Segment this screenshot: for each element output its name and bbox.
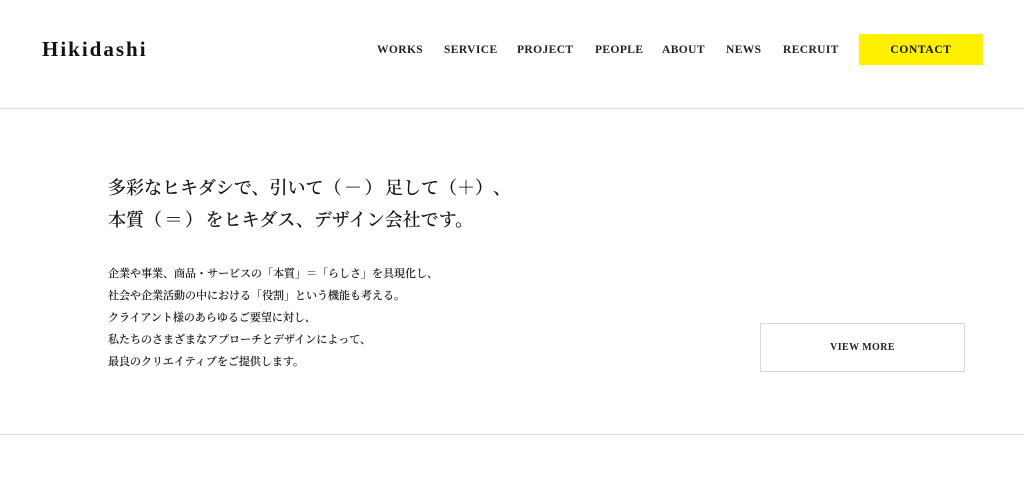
nav: works: WORKS	[377, 44, 423, 56]
nav: project: PROJECT	[517, 44, 573, 56]
contact button: CONTACT	[890, 44, 952, 56]
body text: 私たちのさまざまなアプローチとデザインによって、	[108, 334, 371, 346]
body text: 社会や企業活動の中における「役割」という機能も考える。	[108, 290, 405, 302]
body text: 最良のクリエイティブをご提供します。	[108, 356, 304, 368]
header	[42, 34, 983, 65]
body text: 企業や事業、商品・サービスの「本質」＝「らしさ」を具現化し、	[108, 268, 438, 280]
logo: Hikidashi	[42, 37, 148, 61]
body text	[108, 268, 438, 368]
contact button	[859, 34, 983, 65]
nav: service: SERVICE	[444, 44, 498, 56]
main heading	[108, 178, 511, 230]
body text: クライアント様のあらゆるご要望に対し、	[108, 312, 316, 324]
main heading: 本質（＝）をヒキダス、デザイン会社です。	[108, 210, 473, 230]
nav: people: PEOPLE	[595, 44, 643, 56]
navigation menu	[377, 44, 839, 56]
nav: news: NEWS	[726, 44, 761, 56]
view more button	[760, 323, 965, 372]
main heading: 多彩なヒキダシで、引いて（－）足して（＋）、	[108, 178, 511, 198]
view more button: VIEW MORE	[830, 342, 895, 353]
nav: recruit: RECRUIT	[783, 44, 839, 56]
nav: about: ABOUT	[662, 44, 705, 56]
